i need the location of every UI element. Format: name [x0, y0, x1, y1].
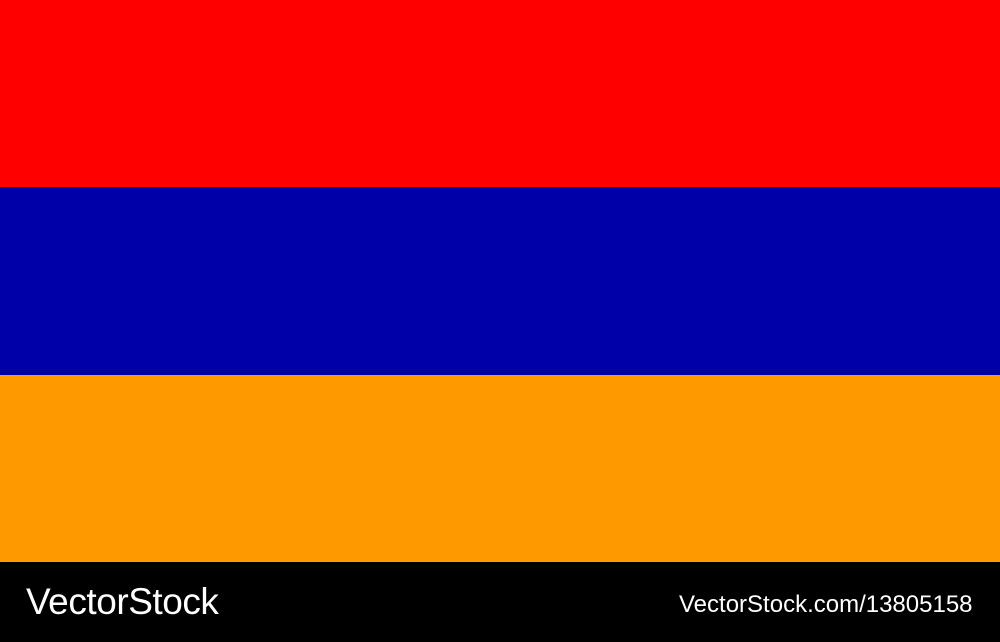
- VectorStock logo text: VectorStock: [26, 581, 218, 622]
- orange stripe: [0, 375, 1000, 562]
- image ID text: VectorStock.com/13805158: [679, 591, 973, 618]
- blue stripe: [0, 187, 1000, 375]
- red stripe: [0, 0, 1000, 187]
- footer bar: [0, 562, 1000, 642]
